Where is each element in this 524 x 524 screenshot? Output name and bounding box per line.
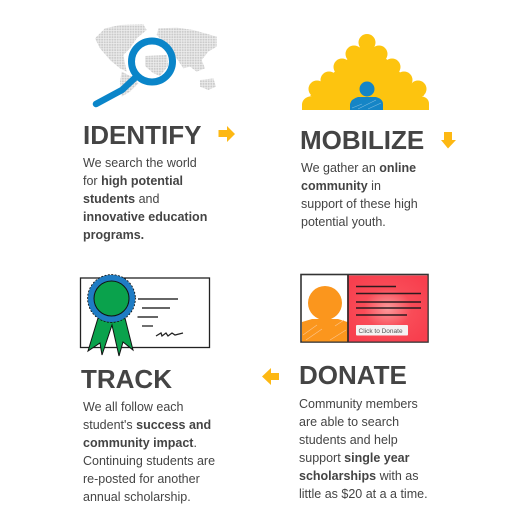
- arrow: down: [441, 132, 456, 148]
- text: donate body: little as $20 at a a time.: [299, 487, 428, 501]
- heading: mobilize: MOBILIZE: [300, 125, 424, 155]
- text: mobilize body: [301, 161, 418, 229]
- icon: donation card: [300, 274, 429, 343]
- arrow: left: [262, 368, 279, 385]
- text: donate body: scholarships with as: [299, 469, 419, 483]
- heading: identify: IDENTIFY: [83, 120, 201, 150]
- text: identify body: [83, 156, 207, 242]
- text: donate body: [299, 397, 428, 501]
- text: identify body: programs.: [83, 228, 144, 242]
- person in crowd: [350, 82, 383, 110]
- heading: track: TRACK: [81, 364, 172, 394]
- text: mobilize body: support of these high: [301, 197, 418, 211]
- text: track body: re-posted for another: [83, 472, 200, 486]
- text: identify body: students and: [83, 192, 159, 206]
- text: donate body: Community members: [299, 397, 418, 411]
- text: donate body: are able to search: [299, 415, 399, 429]
- icon: certificate with ribbon: [80, 274, 210, 356]
- arrow: right: [218, 126, 235, 142]
- text: mobilize body: We gather an online: [301, 161, 416, 175]
- text: track body: student's success and: [83, 418, 211, 432]
- text: identify body: innovative education: [83, 210, 207, 224]
- icon: crowd pyramid with person: [302, 34, 429, 110]
- text: mobilize body: potential youth.: [301, 215, 386, 229]
- text: track body: Continuing students are: [83, 454, 215, 468]
- text: mobilize body: community in: [301, 179, 381, 193]
- ribbon tails: [88, 318, 133, 356]
- magnifying glass: [96, 41, 172, 104]
- icon: world map with magnifying glass: [92, 24, 217, 108]
- text: track body: [83, 400, 215, 504]
- text: donate body: students and help: [299, 433, 398, 447]
- text: donate body: support single year: [299, 451, 410, 465]
- text: identify body: for high potential: [83, 174, 183, 188]
- text: identify body: We search the world: [83, 156, 197, 170]
- heading: donate: DONATE: [299, 360, 407, 390]
- orange person: [302, 286, 348, 342]
- button: [356, 325, 408, 336]
- text: track body: annual scholarship.: [83, 490, 191, 504]
- text: track body: We all follow each: [83, 400, 184, 414]
- text: track body: community impact.: [83, 436, 197, 450]
- rosette: [88, 276, 134, 322]
- button: Click to Donate: [358, 328, 403, 335]
